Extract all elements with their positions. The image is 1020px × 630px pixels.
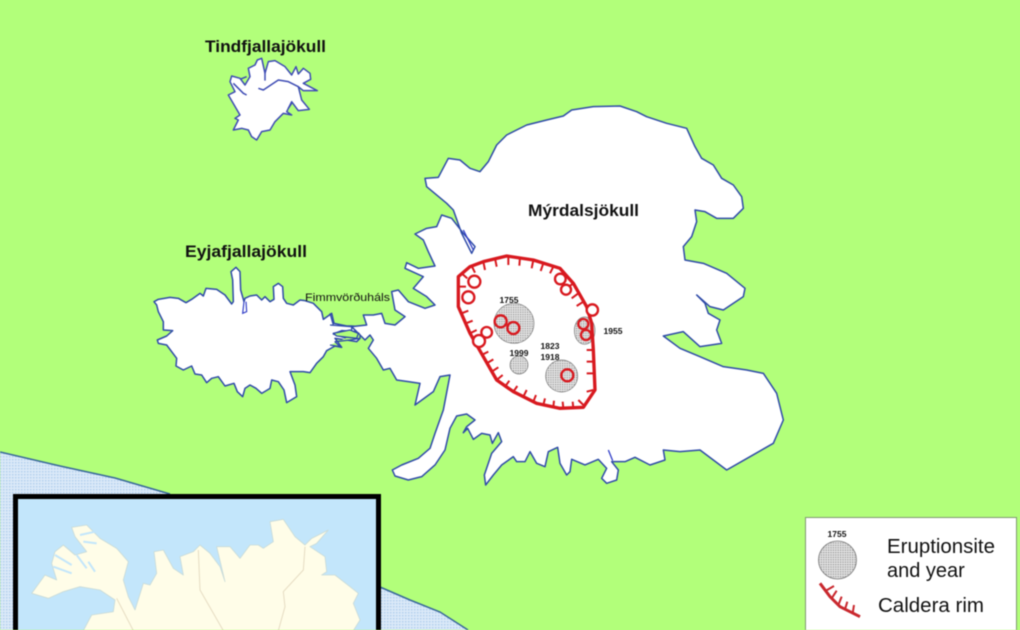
sea, south-west coast <box>0 452 170 630</box>
inset map of Iceland <box>16 496 378 630</box>
glacier: Mýrdalsjökull <box>352 106 783 485</box>
caldera rim <box>458 256 595 408</box>
sea, south coast <box>380 587 468 630</box>
year 1755: 1755 <box>500 295 519 305</box>
label: Fimmvörðuháls: Fimmvörðuháls <box>305 292 391 304</box>
year 1955: 1955 <box>604 326 623 336</box>
label: Eyjafjallajökull: Eyjafjallajökull <box>185 242 307 261</box>
year 1918: 1918 <box>541 352 560 362</box>
legend caldera symbol <box>820 583 860 617</box>
vents <box>462 274 598 381</box>
label: Mýrdalsjökull: Mýrdalsjökull <box>528 201 639 220</box>
Iceland landmass <box>32 519 360 630</box>
Fimmvörðuháls neck <box>330 313 360 347</box>
coastline, south <box>380 587 468 630</box>
legend text: and year: and year <box>887 560 965 582</box>
label: Tindfjallajökull: Tindfjallajökull <box>205 37 326 56</box>
legend text: eruption site: Eruptionsite <box>887 536 995 558</box>
year 1823: 1823 <box>541 341 560 351</box>
glacier: Tindfjallajökull <box>228 58 317 140</box>
coastline, south-west <box>0 452 170 494</box>
legend year: 1755 <box>828 529 847 539</box>
year 1999: 1999 <box>510 348 529 358</box>
legend <box>806 518 1016 630</box>
legend eruption symbol <box>818 541 856 579</box>
glacier: Eyjafjallajökull <box>154 267 360 403</box>
legend text: caldera rim: Caldera rim <box>878 595 984 617</box>
eruption sites <box>494 303 595 392</box>
